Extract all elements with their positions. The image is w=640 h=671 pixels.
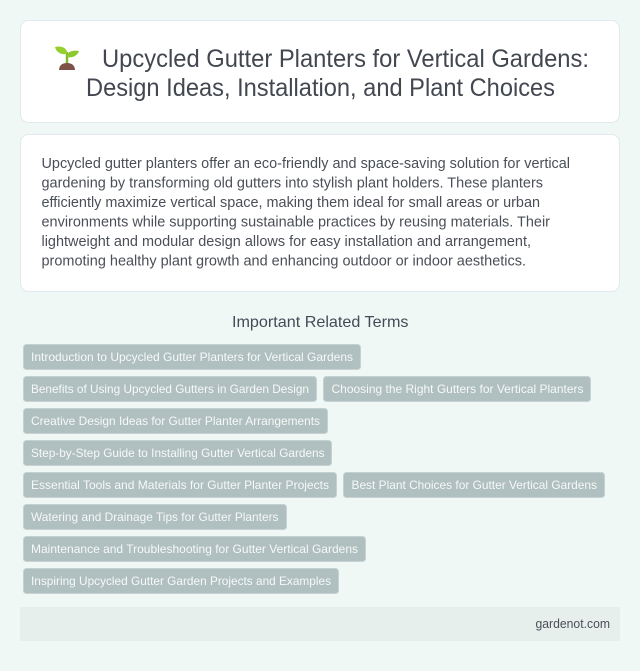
description text: efficiently maximize vertical space, making them ideal for small areas or urban [42, 194, 540, 211]
description text: environments while supporting sustainable practices by reusing materials. Their [42, 214, 550, 230]
tag: benefits: Benefits of Using Upcycled Gutters in Garden Design [31, 382, 309, 396]
tag: best plants [344, 472, 604, 498]
tag: maintenance: Maintenance and Troubleshooting for Gutter Vertical Gardens [31, 542, 358, 556]
tag: step-by-step [24, 440, 332, 466]
tag list [24, 344, 604, 594]
tag: inspiring [24, 568, 338, 594]
tag: maintenance [24, 536, 366, 562]
tag: introduction: Introduction to Upcycled Gutter Planters for Vertical Gardens [31, 350, 353, 364]
tag: essential tools [24, 472, 336, 498]
title line 1: Upcycled Gutter Planters for Vertical Gardens: [102, 45, 589, 73]
description text: Upcycled gutter planters offer an eco-friendly and space-saving solution for vertical [42, 155, 570, 172]
panel: description card [20, 134, 620, 292]
tag: choosing gutters: Choosing the Right Gutters for Vertical Planters [332, 382, 584, 396]
description text: gardening by transforming old gutters into stylish plant holders. These planters [42, 174, 543, 192]
description text: lightweight and modular design allows for easy installation and arrangement, [42, 233, 531, 250]
tag: creative design [24, 408, 328, 434]
tag: watering: Watering and Drainage Tips for Gutter Planters [31, 510, 278, 524]
tag: watering [24, 504, 286, 530]
tag: essential tools: Essential Tools and Materials for Gutter Planter Projects [31, 478, 329, 492]
tag: inspiring: Inspiring Upcycled Gutter Garden Projects and Examples [31, 574, 331, 588]
tag: choosing gutters [324, 376, 590, 402]
tag: step-by-step: Step-by-Step Guide to Installing Gutter Vertical Gardens [31, 446, 324, 460]
description text: promoting healthy plant growth and enhancing outdoor or indoor aesthetics. [42, 252, 526, 270]
footer [20, 607, 620, 641]
tag: creative design: Creative Design Ideas for Gutter Planter Arrangements [31, 414, 320, 428]
tag: best plants: Best Plant Choices for Gutter Vertical Gardens [352, 478, 597, 492]
tag: benefits [24, 376, 316, 402]
heading: important related terms: Important Related Terms [232, 314, 408, 331]
panel: title card [20, 20, 620, 122]
description text [42, 155, 570, 270]
icon: seedling [55, 46, 79, 70]
footer source text: gardenot.com [536, 617, 610, 631]
tag: introduction [24, 344, 360, 370]
title line 2: Design Ideas, Installation, and Plant Choices [86, 74, 555, 102]
